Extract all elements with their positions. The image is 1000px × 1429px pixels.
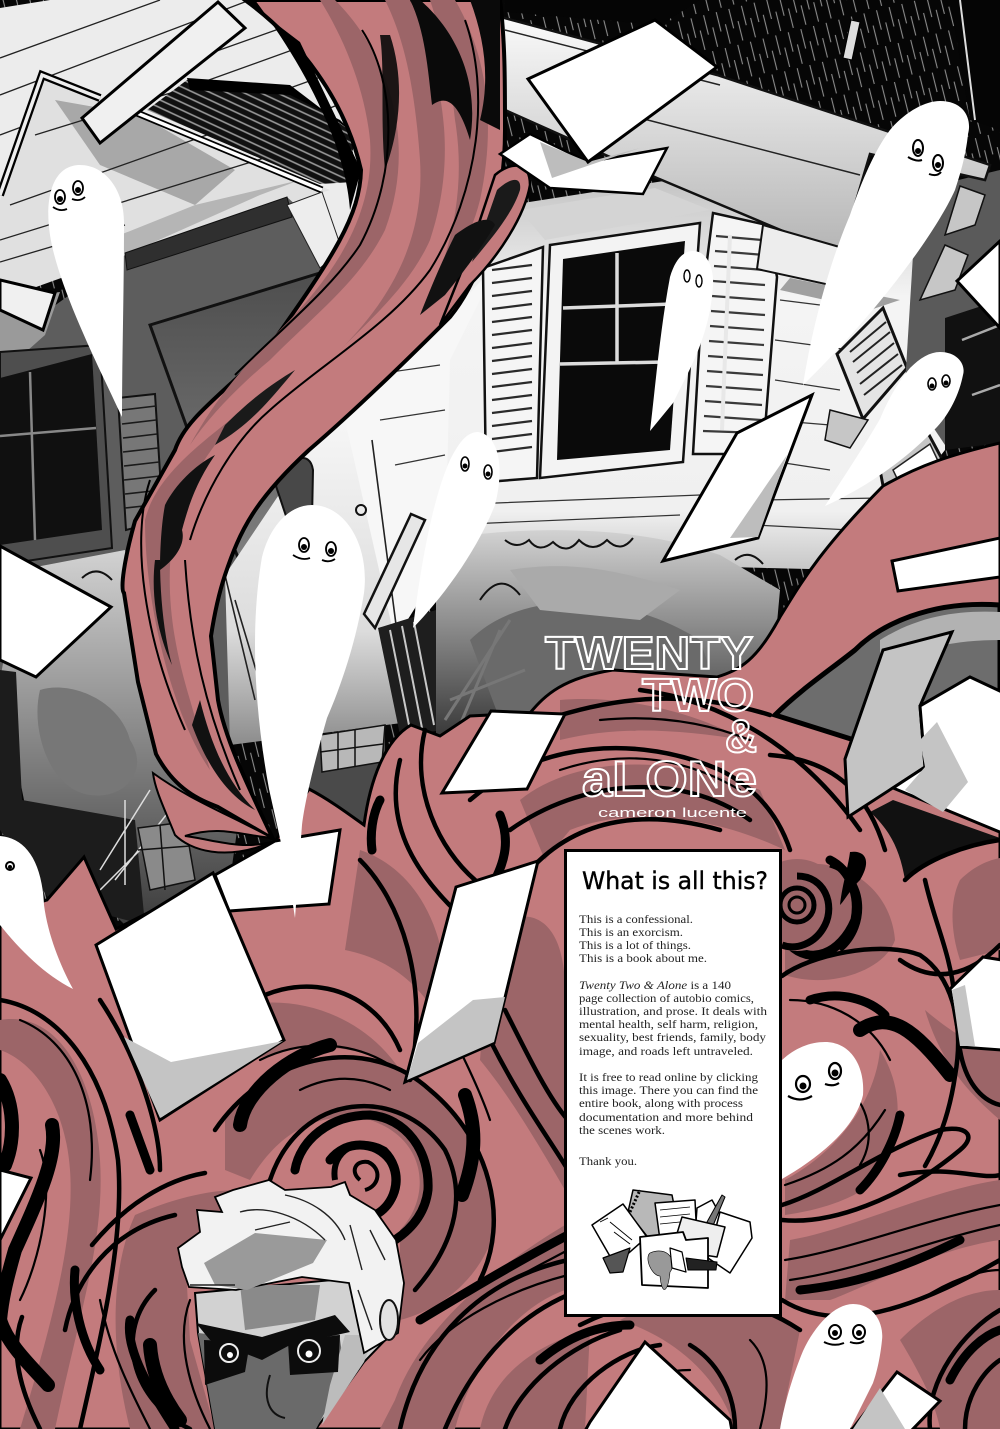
paper: right edge shadow: [952, 985, 975, 1046]
panel body text: page collection of autobio comics,: [579, 991, 754, 1005]
icon: pile of notebooks, letters, folder and knife: [592, 1190, 752, 1290]
paper: bottom center: [585, 1342, 732, 1429]
panel body text: Thank you.: [579, 1154, 637, 1168]
paper: bottom right shadow: [853, 1388, 905, 1429]
ghost: upper right: [803, 101, 969, 385]
paper: center tall: [405, 861, 538, 1082]
panel body text: Twenty Two & Alone is a 140: [579, 978, 731, 992]
brick porch steps: [138, 725, 385, 890]
hair shadow: [204, 1233, 327, 1290]
main wall, window and shutters: [330, 170, 1000, 640]
panel body text: [579, 912, 767, 1168]
ghost: porch rail: [413, 432, 500, 628]
cheek highlight: [322, 1335, 375, 1425]
porch interior wall: [0, 192, 345, 745]
panel body text: illustration, and prose. It deals with: [579, 1004, 767, 1018]
panel heading: What is all this?: [582, 867, 768, 895]
paper: top right sheet: [528, 20, 717, 162]
porch gable with dark shingle roof: [0, 75, 353, 300]
panel body text: sexuality, best friends, family, body: [579, 1030, 766, 1044]
white fascia boards: [497, 16, 990, 310]
ghost: door, tall: [255, 505, 365, 918]
paper: above right: [957, 241, 1000, 328]
hair: [178, 1180, 404, 1353]
tendril ink: thick black swaths: [0, 690, 1000, 1429]
panel body text: documentation and more behind: [579, 1110, 753, 1124]
panel body text: This is an exorcism.: [579, 925, 683, 939]
panel body text: This is a confessional.: [579, 912, 693, 926]
right eye: [288, 1335, 340, 1375]
swirl beside the panel: [751, 852, 866, 951]
paper: left edge: [0, 546, 111, 677]
forehead shadow: [240, 1285, 320, 1330]
paper: shadow under top sheet: [540, 142, 640, 178]
paper: under fascia: [500, 134, 667, 194]
panel body text: this image. There you can find the: [579, 1083, 758, 1097]
ghost: porch left: [48, 165, 124, 417]
upper siding on the left: [0, 0, 362, 260]
left eye: [204, 1340, 250, 1385]
paper: center right shadow: [730, 455, 787, 538]
lower face shadow: [198, 1325, 345, 1429]
paper: middle: [442, 711, 565, 793]
paper: left bottom edge: [0, 1170, 31, 1240]
panel body text: image, and roads left untraveled.: [579, 1044, 753, 1058]
paper: gray sheet: [845, 632, 952, 817]
title: TWENTY: [545, 627, 753, 679]
title: TWO: [642, 669, 754, 721]
brow: [196, 1315, 350, 1360]
tendril shadow bands: [0, 699, 1000, 1429]
figure: man's head at bottom: [178, 1180, 404, 1429]
ghost: right of panel: [782, 1042, 863, 1179]
paper: right band: [892, 538, 1000, 591]
panel body text: It is free to read online by clicking: [579, 1070, 758, 1084]
paper: large lower left shadow: [124, 1037, 283, 1118]
front door and stained glass: [225, 420, 445, 745]
panel body text: mental health, self harm, religion,: [579, 1017, 758, 1031]
title: [545, 627, 757, 820]
paper: right white: [893, 677, 1000, 833]
paper: right edge: [950, 957, 1000, 1050]
panel body text: This is a book about me.: [579, 951, 707, 965]
bushes: [0, 530, 780, 930]
panel: What is all this?: [566, 850, 780, 1316]
ghost: window: [650, 251, 713, 431]
face: [195, 1277, 398, 1429]
hair strands: [190, 1195, 385, 1330]
paper: bottom right: [850, 1372, 940, 1429]
paper: large lower left: [96, 873, 284, 1120]
paper: right white shadow: [905, 722, 968, 812]
title: aLONe: [582, 751, 757, 807]
nose: [267, 1375, 285, 1418]
title: &: [725, 710, 757, 762]
board left edge: [0, 280, 55, 330]
left window and shutter: [0, 345, 163, 565]
paper: lower left stack: [215, 830, 340, 911]
paper: center tall shadow: [407, 997, 505, 1080]
plank top left: [82, 2, 245, 143]
red mass: swirling tendrils filling lower page: [0, 443, 1000, 1429]
ghost: bottom: [780, 1304, 882, 1429]
panel body text: entire book, along with process: [579, 1096, 743, 1110]
panel body text: This is a lot of things.: [579, 938, 691, 952]
ear: [380, 1300, 398, 1340]
ghost: left edge lower: [0, 836, 73, 989]
ghost: shutter right: [825, 352, 964, 506]
panel body text: the scenes work.: [579, 1123, 665, 1137]
title: cameron lucente: [598, 805, 747, 820]
paper: center right: [663, 395, 812, 561]
main tendril rising through the house: [122, 0, 530, 853]
spiral above the head: [334, 1144, 398, 1212]
